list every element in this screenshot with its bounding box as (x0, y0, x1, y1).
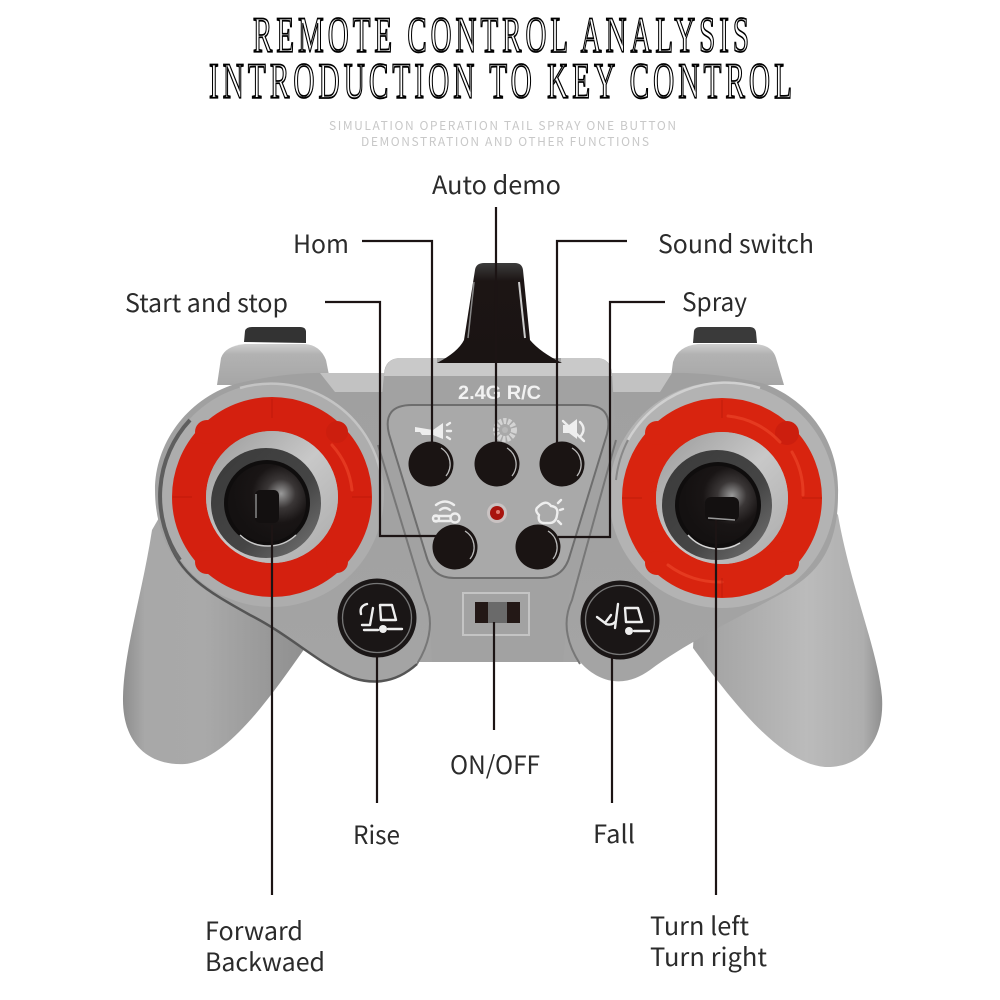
model label: 2.4G R/C (458, 383, 541, 404)
horn button (408, 442, 454, 486)
icon: auto demo (496, 421, 514, 439)
label: sound switch: Sound switch (658, 225, 814, 261)
label: start and stop: Start and stop (125, 284, 288, 320)
center top plate (378, 358, 615, 662)
spray line (558, 302, 665, 537)
right grip (693, 490, 882, 767)
label: fall: Fall (593, 815, 635, 851)
top band (320, 373, 672, 392)
subtitle (329, 117, 676, 150)
left lobe edge (378, 445, 430, 664)
plate top bevel (384, 358, 612, 376)
icon: remote key (433, 502, 460, 522)
spray button (516, 524, 560, 570)
label: turn left turn right (650, 907, 768, 974)
right joystick (656, 432, 788, 564)
label: forward backward: Backwaed (205, 943, 325, 979)
label: auto demo: Auto demo (432, 166, 561, 202)
label: spray: Spray (682, 283, 747, 319)
fall line (611, 655, 613, 803)
turn line (715, 520, 717, 895)
remote controller (123, 263, 882, 767)
controller body (155, 373, 838, 682)
sound switch button (540, 442, 584, 486)
label: rise: Rise (353, 816, 400, 852)
horn line (362, 241, 432, 445)
right red ring (622, 400, 822, 597)
icon: horn (415, 423, 451, 439)
forward line (271, 525, 273, 895)
subtitle: DEMONSTRATION AND OTHER FUNCTIONS (361, 133, 649, 150)
left red ring (173, 399, 371, 596)
lower edge shadow (167, 537, 417, 681)
label: turn left turn right: Turn right (650, 938, 768, 974)
label: turn left turn right: Turn left (650, 907, 750, 943)
auto demo button (474, 442, 520, 486)
left grip (123, 490, 305, 764)
label: on/off: ON/OFF (450, 746, 540, 782)
right joystick well (609, 382, 835, 608)
antenna (437, 263, 562, 363)
label: forward backward (205, 912, 325, 979)
right lobe edge (567, 440, 616, 664)
center button panel (388, 405, 608, 578)
subtitle: SIMULATION OPERATION TAIL SPRAY ONE BUTTON (329, 117, 676, 134)
on/off switch (463, 593, 529, 635)
left joystick (206, 431, 338, 563)
fall button (580, 580, 660, 660)
start and stop line (325, 302, 436, 536)
title (209, 8, 796, 110)
left joystick well (160, 383, 384, 607)
label: forward backward: Forward (205, 912, 303, 948)
icon: sound off (563, 419, 584, 441)
right shoulder trigger (693, 327, 757, 343)
left shoulder trigger (244, 327, 306, 343)
red LED (487, 503, 507, 523)
rise button (338, 578, 416, 658)
icon: spray (536, 500, 563, 524)
start and stop button (432, 524, 478, 570)
left shoulder (217, 344, 331, 385)
on/off line (493, 622, 495, 730)
right shoulder (670, 344, 784, 385)
leader lines (272, 207, 716, 895)
label: horn: Hom (293, 225, 349, 261)
auto demo line (495, 207, 497, 445)
rise line (376, 655, 378, 803)
sound switch line (557, 241, 627, 445)
